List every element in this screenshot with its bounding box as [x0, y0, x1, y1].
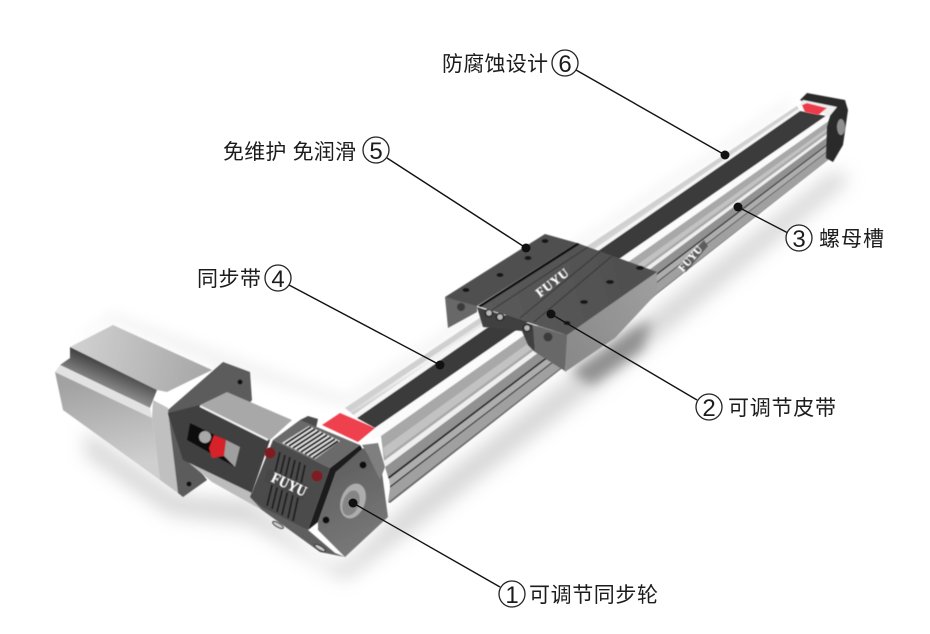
pulley	[336, 480, 370, 522]
carriage grooves	[492, 247, 612, 322]
far cap bearing	[837, 119, 845, 135]
callout 3: 3	[792, 226, 806, 253]
hex end plate	[318, 443, 388, 557]
rail back silver strip	[345, 106, 800, 418]
callout 1: 1	[505, 582, 519, 609]
red screws	[264, 448, 276, 458]
near end cap	[250, 413, 388, 557]
far cap white belt cover	[799, 100, 837, 118]
callout 3	[734, 202, 884, 253]
callout 2: 2	[702, 395, 716, 422]
far cap body	[800, 93, 848, 162]
coupler housing	[168, 392, 292, 510]
callout 5	[223, 137, 530, 252]
bottom slots	[272, 520, 326, 553]
plate holes	[360, 462, 366, 468]
motor chamfer	[55, 365, 152, 418]
callout 3: 螺母槽	[819, 228, 884, 251]
rail logo: FUYU	[676, 244, 705, 275]
bearings opening	[477, 307, 535, 352]
callout 4: 4	[271, 266, 285, 293]
cap front	[250, 440, 330, 530]
slide carriage	[445, 234, 657, 372]
stepper motor	[55, 325, 252, 497]
motor rear face	[152, 400, 178, 493]
coupler lower side	[183, 458, 262, 510]
callout 6: 6	[558, 51, 572, 78]
far end cap	[799, 93, 848, 162]
callout 2	[546, 310, 836, 422]
ground shadows	[68, 98, 850, 580]
coupler top	[200, 392, 292, 440]
cap underside	[250, 497, 345, 557]
carriage holes	[457, 239, 644, 342]
carriage left bracket	[445, 297, 477, 328]
lower silver extrusion	[381, 120, 830, 503]
coupler side	[168, 405, 270, 493]
small tab	[300, 416, 318, 428]
coupler window	[187, 423, 240, 467]
callout 2: 可调节皮带	[728, 397, 836, 420]
slit	[478, 243, 580, 307]
callout 4	[197, 265, 444, 370]
red belt clamp	[322, 413, 375, 442]
callout 6	[442, 50, 730, 160]
motor groove	[60, 347, 157, 408]
cap front ribs	[267, 452, 305, 521]
motor top face	[70, 325, 212, 392]
far red block	[802, 103, 827, 115]
carriage plate	[445, 234, 577, 306]
timing belt dark band	[357, 111, 826, 428]
cap top	[273, 420, 360, 468]
carriage front face	[533, 325, 567, 371]
linear rail profile	[345, 106, 830, 503]
cap logo: FUYU	[269, 470, 309, 501]
callout 4: 同步带	[197, 268, 261, 291]
white guide stripe	[370, 116, 830, 441]
motor side face	[55, 372, 160, 480]
cap top ribs	[282, 426, 340, 459]
callout 1	[348, 498, 658, 609]
carriage logo: FUYU	[533, 265, 572, 300]
callout 6: 防腐蚀设计	[442, 53, 548, 76]
black chamfer	[308, 445, 363, 530]
carriage main top	[478, 243, 657, 335]
motor flange	[168, 362, 252, 497]
callout 5: 免维护 免润滑	[223, 141, 356, 164]
callout 5: 5	[369, 138, 383, 165]
callout 1: 可调节同步轮	[529, 584, 658, 607]
carriage right side	[565, 272, 657, 372]
